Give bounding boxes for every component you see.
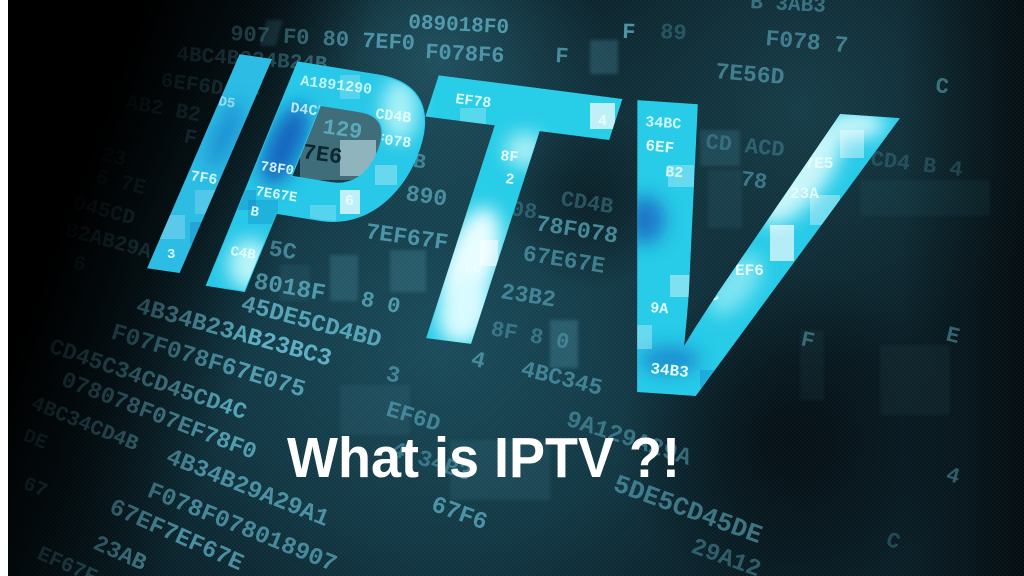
letter texture: soft lights, tiles and micro hex digits: 7F6 — [189, 168, 219, 189]
background hex code rows: AB2AB29A — [50, 217, 154, 265]
letter texture: soft lights, tiles and micro hex digits: 78F07 — [259, 159, 303, 181]
background hex code rows: 890 — [404, 181, 449, 213]
background hex code rows: 4BC345 — [518, 357, 605, 402]
background hex code rows: 3 — [384, 361, 402, 390]
background hex code rows: 9A129A29A — [563, 407, 695, 473]
letter texture: soft lights, tiles and micro hex digits: EF78 — [454, 91, 492, 112]
background hex code rows: F — [799, 327, 817, 355]
letter texture: soft lights, tiles and micro hex digits: 8F — [500, 148, 519, 167]
letter texture: soft lights, tiles and micro hex digits: 6 — [345, 193, 354, 210]
background hex code rows: 6 — [70, 252, 88, 278]
background hex code rows: 4 — [22, 59, 30, 75]
background hex code rows: 67E67E — [521, 241, 607, 280]
background hex code rows: 78F078 — [534, 211, 620, 250]
background hex code rows: 4 — [943, 463, 963, 490]
background hex code rows: 6EF6D EF — [159, 70, 262, 107]
P counter lit tiles — [300, 100, 385, 180]
letter texture: soft lights, tiles and micro hex digits: 34B3 — [649, 360, 690, 382]
background hex code rows: 4BC34CD4B — [27, 393, 142, 457]
background hex code rows: C — [934, 74, 950, 100]
background hex code rows: 7EF67F — [364, 219, 450, 256]
heading: IPTV glowing perspective letters — [147, 54, 900, 396]
background hex code rows: 4 — [468, 347, 488, 375]
background hex code rows: 23B2 — [499, 279, 558, 314]
background hex code rows: 078078F07EF78F0 — [57, 367, 260, 466]
letter texture: soft lights, tiles and micro hex digits: D4CD4 — [289, 100, 336, 122]
background hex code rows: 67F6 — [427, 492, 491, 537]
background hex code rows: F07F078F67E075 — [108, 320, 308, 405]
background hex code rows: 78 — [739, 167, 769, 196]
background hex code rows: 7E56D — [714, 59, 785, 91]
background hex code rows: 4 34B3 — [388, 437, 475, 487]
background hex code rows: 8F 8 0 — [489, 317, 571, 356]
letter T: T — [328, 0, 652, 432]
background hex code rows: 5DE5CD45DE — [609, 469, 766, 551]
letter texture: soft lights, tiles and micro hex digits: B — [249, 204, 261, 221]
letter texture: soft lights, tiles and micro hex digits: 2 — [504, 171, 515, 189]
background hex code rows: F — [182, 126, 199, 151]
P counter lit tiles: 7E6 — [301, 140, 344, 170]
letter texture: soft lights, tiles and micro hex digits: 67E5 — [795, 155, 833, 173]
P counter lit tiles: 129 — [321, 115, 364, 145]
background hex code rows: EF6D — [383, 397, 443, 438]
letter texture: soft lights, tiles and micro hex digits: 7E67E — [254, 184, 298, 207]
letter texture: soft lights, tiles and micro hex digits: F078 — [374, 131, 412, 152]
background hex code rows: CD4B — [559, 187, 615, 220]
letter texture: soft lights, tiles and micro hex digits — [160, 73, 885, 388]
background hex code rows: E — [943, 323, 962, 350]
letter texture: soft lights, tiles and micro hex digits: EF6 — [735, 262, 764, 280]
background hex code rows: F078F6 — [425, 40, 505, 69]
letter texture: soft lights, tiles and micro hex digits: 3 — [167, 247, 175, 263]
title caption: What is IPTV ?! — [287, 426, 680, 490]
background hex code rows: 8 0 — [359, 287, 402, 320]
letter P: P — [161, 0, 483, 379]
letter texture: soft lights, tiles and micro hex digits: C4B — [229, 244, 257, 264]
background hex code rows: 23AB — [89, 531, 150, 576]
background hex code rows: 4B34B23AB23BC3 — [133, 294, 334, 374]
letter texture: soft lights, tiles and micro hex digits: D5 — [217, 94, 236, 113]
background tiles — [260, 20, 990, 500]
background hex code rows: 0 — [40, 134, 48, 150]
background hex code rows: F — [555, 44, 569, 70]
page margin strip — [0, 0, 8, 576]
letter texture: soft lights, tiles and micro hex digits: B2 — [665, 164, 684, 182]
background hex code rows: 089018F0 — [408, 12, 510, 40]
letter texture: soft lights, tiles and micro hex digits: 9A — [650, 300, 669, 318]
background hex code rows: 8018F — [252, 269, 327, 308]
background hex code rows: F078F078018907 — [143, 478, 340, 576]
background hex code rows: CD45CD — [58, 190, 137, 231]
letter texture: soft lights, tiles and micro hex digits: 5C — [700, 287, 720, 305]
background hex code rows: 23 — [98, 144, 128, 172]
background hex code rows: 67 — [19, 473, 50, 503]
background hex code rows: 4B34B29A29A1 — [162, 444, 333, 534]
background hex code rows: CD ACD — [704, 130, 786, 163]
letter texture: soft lights, tiles and micro hex digits: 4 — [598, 113, 607, 130]
background hex code rows: 6 7E — [93, 166, 148, 201]
background hex code rows: 67EF7EF67E — [105, 495, 247, 576]
background hex code rows: 45DE5CD4BD — [238, 292, 384, 355]
background hex code rows: CD4B — [374, 144, 428, 176]
letter texture: soft lights, tiles and micro hex digits: 23A — [790, 185, 819, 203]
background hex code rows: AB2 B2 — [124, 92, 202, 128]
background hex code rows: DE — [19, 425, 50, 455]
background hex code rows: 08 — [509, 197, 539, 226]
background hex code rows: C — [883, 528, 903, 556]
letter texture: soft lights, tiles and micro hex digits: A1891290 — [299, 73, 373, 99]
letter texture: soft lights, tiles and micro hex digits: CD4B — [374, 106, 412, 127]
background hex code rows: 5C — [267, 236, 298, 266]
letter texture: soft lights, tiles and micro hex digits: 6EF — [644, 137, 675, 158]
background hex code rows: 4BC4B234B24B — [176, 44, 328, 78]
background hex code rows: C — [18, 9, 27, 25]
letter texture: soft lights, tiles and micro hex digits: 6D — [465, 261, 482, 277]
background hex code rows: 907 F0 80 7EF0 — [230, 22, 416, 57]
letter texture: soft lights, tiles and micro hex digits: B — [800, 129, 810, 147]
background hex code rows: 89 — [660, 20, 687, 46]
background hex code rows: F078 7 — [764, 26, 849, 59]
background hex code rows: CD4 B 4 — [869, 147, 964, 183]
letter V: V — [500, 11, 937, 492]
background hex code rows: CD45C34CD45CD4C — [46, 334, 250, 426]
background hex code rows: F — [622, 20, 636, 45]
letter texture: soft lights, tiles and micro hex digits: 34BC — [645, 114, 682, 134]
